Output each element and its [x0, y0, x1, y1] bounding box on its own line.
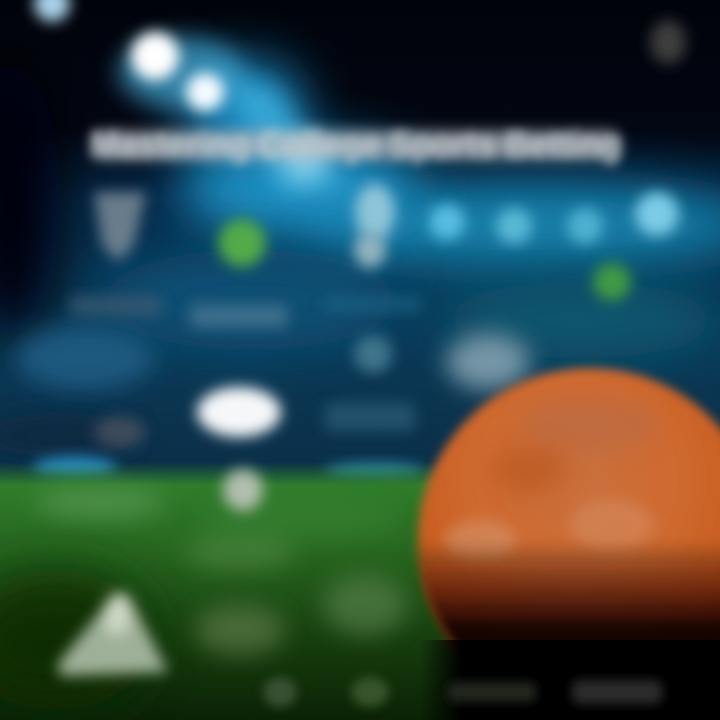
icon: small white marker [223, 469, 263, 511]
stadium floodlights [34, 0, 327, 182]
title: Mastering College Sports Betting [91, 124, 621, 165]
icon: warning triangle [58, 592, 168, 676]
icon: white ellipse [197, 387, 281, 437]
icon: green dot right [593, 263, 631, 301]
background: night sky and stands [0, 0, 720, 484]
icon: trophy column [354, 184, 395, 268]
text block: stats labels [70, 296, 422, 431]
basketball [418, 368, 720, 720]
small stand detail [94, 416, 146, 448]
icon: shield left [94, 192, 146, 262]
footer text [263, 677, 662, 707]
row of glowing indicators [429, 192, 679, 244]
grey figure behind ball [446, 334, 530, 390]
icon: top right badge [650, 20, 686, 64]
playing field [0, 464, 456, 720]
icon: green dot left [218, 219, 266, 267]
